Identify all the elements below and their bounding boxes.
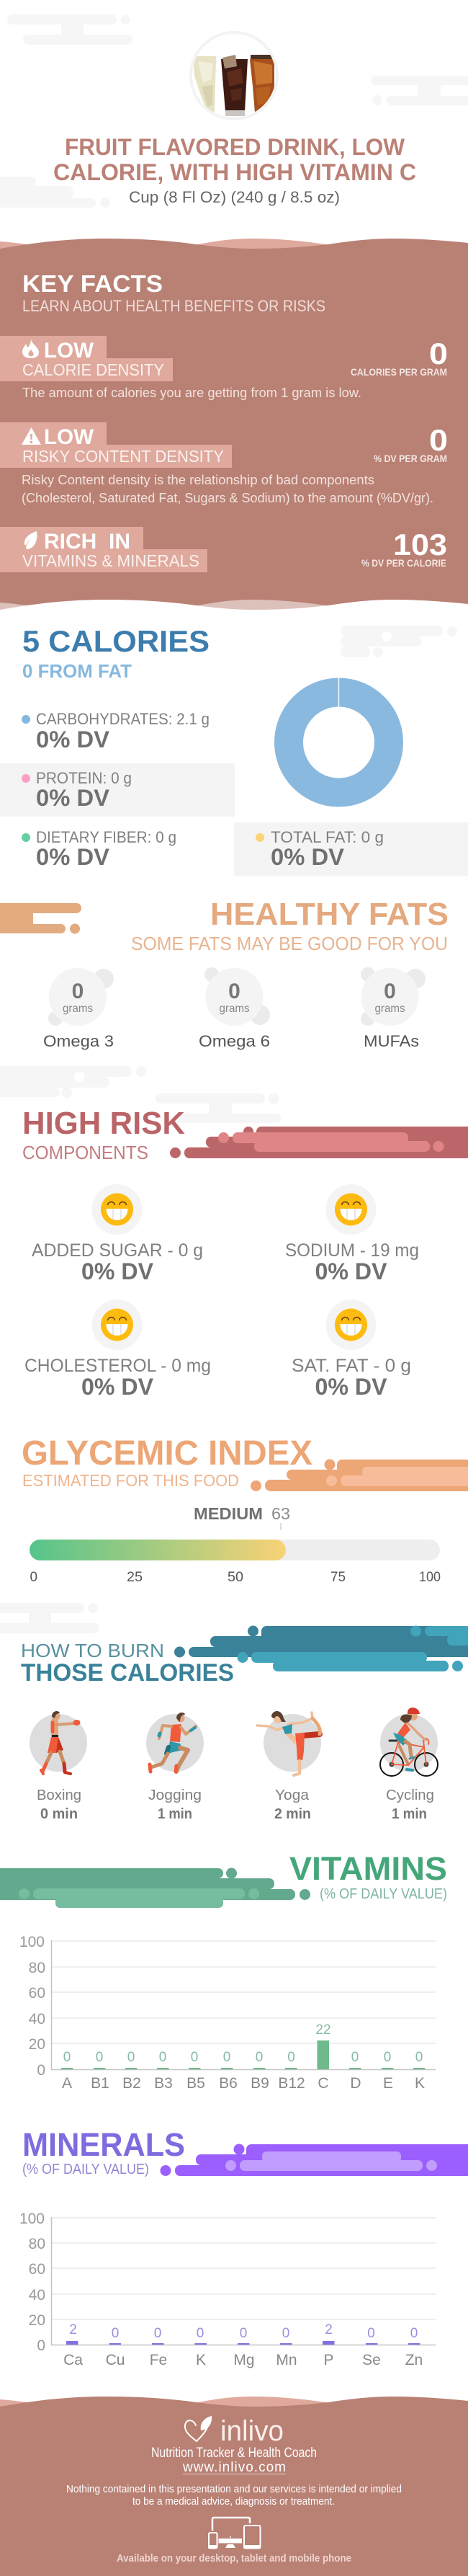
panel: vitamins [0, 1850, 447, 2092]
risk item: sodium: 0% DV [315, 1258, 387, 1284]
gauge scale: 75 [330, 1570, 346, 1585]
activity: yoga [257, 1711, 321, 1822]
bar chart: minerals: 0 [367, 2326, 375, 2341]
decorative bar: burn [174, 1626, 468, 1671]
legend: dietary fiber [22, 828, 176, 870]
legend: total fat: 0% DV [271, 844, 345, 870]
gauge scale: 100 [419, 1570, 441, 1585]
legend: total fat [234, 822, 468, 876]
bar chart: vitamins: 0 [415, 2050, 423, 2065]
bar chart: vitamins: 0 [191, 2050, 198, 2065]
icon: cyclist [380, 1707, 438, 1776]
logo: inlivo [185, 2415, 284, 2447]
risk item: saturated fat: 0% DV [315, 1374, 387, 1400]
legend: carbohydrates [22, 710, 210, 752]
stat: mufas [361, 967, 426, 1050]
fact: risky content density [0, 422, 448, 505]
serving size: Cup (8 Fl Oz) (240 g / 8.5 oz) [129, 188, 340, 206]
decorative bar: glycemic [251, 1459, 468, 1491]
gauge scale: 50 [228, 1570, 243, 1585]
bar chart: vitamins: 0 [127, 2050, 135, 2065]
activity: cycling: 1 min [392, 1806, 427, 1822]
heading: vitamins: VITAMINS [289, 1850, 447, 1887]
icon: pale drink glass [193, 56, 216, 112]
decorative bar: vitamins [0, 1868, 310, 1908]
icon: runner [146, 1713, 204, 1772]
stat: omega 3: Omega 3 [43, 1032, 114, 1050]
activity: cycling: Cycling [386, 1787, 434, 1803]
bar chart: vitamins: 0 [96, 2050, 103, 2065]
label: calorie density: CALORIE DENSITY [22, 360, 164, 379]
disclaimer: Nothing contained in this presentation and our services is intended or implied [66, 2483, 402, 2495]
bar chart: vitamins: 0 [384, 2050, 391, 2065]
activity: jogging: 1 min [158, 1806, 192, 1822]
risk item: saturated fat: SAT. FAT - 0 g [292, 1356, 411, 1376]
bar chart: minerals: Se [362, 2352, 381, 2368]
bar chart: minerals: 0 [410, 2326, 418, 2341]
heading: healthy fats: HEALTHY FATS [210, 897, 449, 932]
stat: mufas: 0 [384, 980, 396, 1003]
panel: key facts [0, 239, 468, 620]
decorative bar: high risk [170, 1127, 468, 1158]
label: low: LOW [44, 339, 94, 363]
description: calorie density: The amount of calories you are getting from 1 gram is low. [22, 386, 361, 400]
legend: dietary fiber: 0% DV [36, 844, 110, 870]
background cloud shape: calories [341, 626, 457, 657]
bar chart: vitamins: 0 [159, 2050, 166, 2065]
bar chart: vitamins: 22 [315, 2022, 331, 2038]
bar chart: vitamins: K [415, 2075, 425, 2092]
unit: dv per gram: % DV PER GRAM [374, 453, 447, 464]
legend: total fat: TOTAL FAT: 0 g [271, 828, 384, 846]
bar chart: minerals: 0 [240, 2326, 247, 2341]
panel: calories [0, 624, 468, 876]
subheading: minerals: (% OF DAILY VALUE) [22, 2162, 149, 2177]
bar chart: vitamins: 60 [29, 1985, 45, 2002]
fact: calorie density [0, 336, 448, 400]
value: dv per calorie: 103 [393, 528, 447, 561]
title: CALORIE, WITH HIGH VITAMIN C [53, 159, 416, 185]
heading: minerals: MINERALS [22, 2126, 185, 2163]
gauge scale: 25 [127, 1570, 143, 1585]
bar chart: vitamins: 100 [19, 1934, 45, 1950]
stat: omega 6: 0 [228, 980, 240, 1003]
icon: yoga pose [257, 1711, 321, 1775]
activity: yoga: Yoga [275, 1787, 310, 1803]
bar chart: vitamins: 80 [29, 1960, 45, 1976]
bar chart: vitamins: D [350, 2075, 361, 2092]
bar chart: minerals: 0 [37, 2337, 45, 2354]
label: vitamins and minerals: VITAMINS & MINERALS [22, 551, 199, 570]
bar chart: vitamins: 40 [29, 2011, 45, 2028]
icon: leaf [24, 531, 37, 549]
label: low: LOW [44, 425, 94, 449]
bar chart: minerals [19, 2211, 436, 2368]
label: risky content density: RISKY CONTENT DENSITY [22, 447, 224, 466]
bar chart: vitamins: 0 [223, 2050, 230, 2065]
bar chart: minerals: 0 [154, 2326, 161, 2341]
risk item: cholesterol: CHOLESTEROL - 0 mg [24, 1356, 211, 1376]
risk item: added sugar: 0% DV [81, 1258, 154, 1284]
subheading: glycemic index: ESTIMATED FOR THIS FOOD [22, 1471, 239, 1490]
gauge bar [30, 1540, 440, 1560]
decorative bar: minerals [160, 2144, 468, 2176]
bar chart: vitamins: 0 [351, 2050, 359, 2065]
activity: cycling [380, 1707, 438, 1822]
activity: jogging [146, 1713, 204, 1822]
panel: healthy fats [0, 897, 449, 1050]
heading: high risk: HIGH RISK [22, 1106, 185, 1141]
icon: amber drink glass [250, 55, 274, 112]
title: FRUIT FLAVORED DRINK, LOW [65, 134, 405, 160]
description: risky content: (Cholesterol, Saturated Fat, Sugars & Sodium) to the amount (%DV/gr). [22, 491, 433, 505]
icon: smiley [92, 1300, 143, 1350]
title [53, 134, 416, 185]
risk item: saturated fat [292, 1300, 411, 1400]
risk item: sodium: SODIUM - 19 mg [285, 1240, 419, 1261]
legend: carbohydrates: CARBOHYDRATES: 2.1 g [36, 710, 210, 728]
bar chart: minerals: 0 [282, 2326, 289, 2341]
gauge marker label: MEDIUM [194, 1504, 263, 1523]
panel: minerals [19, 2126, 468, 2368]
gauge marker label [194, 1504, 290, 1530]
icon: devices [208, 2518, 261, 2549]
bar chart: vitamins: B6 [219, 2075, 238, 2092]
label: rich in: RICH IN [44, 530, 130, 554]
header: drink photo [189, 31, 279, 120]
risk item: sodium [285, 1184, 419, 1284]
bar chart: vitamins: B3 [154, 2075, 173, 2092]
stat: omega 3 [43, 968, 114, 1050]
activity: boxing [30, 1711, 87, 1822]
subheading: healthy fats: SOME FATS MAY BE GOOD FOR YOU [131, 933, 448, 954]
bar chart: vitamins [19, 1934, 436, 2092]
bar chart: minerals: 2 [325, 2322, 333, 2337]
bar chart: minerals: Cu [106, 2352, 125, 2368]
description: risky content: Risky Content density is the relationship of bad components [22, 473, 374, 487]
bar chart: vitamins: B5 [186, 2075, 205, 2092]
icon: smiley [92, 1184, 143, 1235]
icon: smiley [325, 1184, 376, 1235]
unit: dv per calorie: % DV PER CALORIE [361, 557, 446, 569]
gauge marker label: 63 [271, 1504, 290, 1523]
subheading: components: COMPONENTS [22, 1142, 148, 1163]
decorative bar: healthy fats [0, 903, 81, 934]
bar chart: vitamins: A [62, 2075, 72, 2092]
icon: warning triangle [22, 427, 41, 445]
bar chart: minerals: 0 [197, 2326, 204, 2341]
bar chart: minerals: P [323, 2352, 334, 2368]
bar chart: vitamins: B12 [278, 2075, 305, 2092]
bar chart: minerals: 0 [112, 2326, 119, 2341]
stat: omega 3: 0 [72, 980, 84, 1003]
background cloud shapes: header [0, 14, 468, 208]
unit: calories per gram: CALORIES PER GRAM [351, 366, 447, 378]
icon: flame [22, 339, 39, 358]
value: calories per gram: 0 [429, 337, 448, 370]
fact: rich in vitamins and minerals [0, 527, 447, 572]
bar chart: vitamins: C [318, 2075, 329, 2092]
heading: those calories: THOSE CALORIES [21, 1659, 234, 1687]
icon: cola glass [221, 55, 248, 116]
stat: omega 6 [199, 967, 270, 1050]
legend: protein [0, 763, 235, 817]
bar chart: minerals: Fe [150, 2352, 167, 2368]
activity: jogging: Jogging [148, 1787, 202, 1803]
heading: key facts: KEY FACTS [22, 270, 163, 297]
stat: mufas: grams [374, 1003, 405, 1015]
logo: inlivo: inlivo [220, 2415, 284, 2447]
legend: protein: 0% DV [36, 785, 110, 811]
icon: smiley [325, 1300, 376, 1350]
bar chart: minerals: Zn [405, 2352, 423, 2368]
bar chart: minerals: 60 [29, 2261, 45, 2278]
stat: omega 6: Omega 6 [199, 1032, 270, 1050]
bar chart: vitamins: 0 [63, 2050, 71, 2065]
risk item: cholesterol [24, 1300, 211, 1400]
panel: glycemic index [22, 1434, 468, 1585]
legend: dietary fiber: DIETARY FIBER: 0 g [36, 828, 176, 846]
risk item: cholesterol: 0% DV [81, 1374, 154, 1400]
bar chart: vitamins: B1 [91, 2075, 109, 2092]
stat: omega 3: grams [63, 1003, 93, 1015]
bar chart: minerals: 80 [29, 2236, 45, 2252]
icon: boxer [30, 1711, 87, 1774]
gauge scale [30, 1570, 441, 1585]
bar chart: minerals: K [196, 2352, 206, 2368]
activity: boxing: 0 min [40, 1806, 78, 1822]
subheading: vitamins: (% OF DAILY VALUE) [320, 1886, 447, 1902]
bar chart: vitamins: E [383, 2075, 393, 2092]
tagline: Nutrition Tracker & Health Coach [151, 2446, 317, 2461]
panel: burn calories [21, 1626, 468, 1822]
heading: glycemic index: GLYCEMIC INDEX [22, 1434, 312, 1473]
legend: carbohydrates: 0% DV [36, 727, 110, 752]
bar chart: vitamins: 0 [256, 2050, 263, 2065]
description: risky content [22, 473, 433, 505]
bar chart: minerals: 20 [29, 2312, 45, 2329]
subheading: from fat: 0 FROM FAT [22, 660, 132, 682]
website link: www.inlivo.com [182, 2460, 286, 2475]
bar chart: minerals: 100 [19, 2211, 45, 2227]
bar chart: vitamins: B9 [251, 2075, 269, 2092]
disclaimer [66, 2483, 402, 2508]
panel: footer [0, 2397, 468, 2576]
heading: calories: 5 CALORIES [22, 624, 210, 658]
bar chart: minerals: Mn [276, 2352, 297, 2368]
donut chart [289, 677, 389, 793]
bar chart: vitamins: B2 [122, 2075, 141, 2092]
bar chart: vitamins: 0 [287, 2050, 295, 2065]
disclaimer: to be a medical advice, diagnosis or treatment. [132, 2495, 335, 2508]
bar chart: vitamins: 0 [37, 2062, 45, 2079]
heading: how to burn: HOW TO BURN [21, 1640, 164, 1661]
value: dv per gram: 0 [429, 423, 448, 457]
legend: protein: PROTEIN: 0 g [36, 769, 132, 787]
background cloud shape: burn [0, 1603, 99, 1633]
bar chart: minerals: 2 [69, 2322, 77, 2337]
gauge scale: 0 [30, 1570, 37, 1585]
bar chart: minerals: 40 [29, 2287, 45, 2304]
panel: high risk [22, 1106, 468, 1400]
subheading: key facts: LEARN ABOUT HEALTH BENEFITS OR RISKS [22, 297, 325, 315]
bar chart: vitamins: 20 [29, 2036, 45, 2053]
background cloud shapes: high risk [0, 1066, 281, 1123]
risk item: added sugar [32, 1184, 203, 1284]
risk item: added sugar: ADDED SUGAR - 0 g [32, 1240, 203, 1261]
bar chart: minerals: Mg [233, 2352, 255, 2368]
stat: omega 6: grams [219, 1003, 249, 1015]
stat: mufas: MUFAs [364, 1032, 419, 1050]
activity: yoga: 2 min [274, 1806, 311, 1822]
availability note: Available on your desktop, tablet and mobile phone [117, 2552, 351, 2564]
activity: boxing: Boxing [37, 1787, 81, 1803]
bar chart: minerals: Ca [63, 2352, 83, 2368]
